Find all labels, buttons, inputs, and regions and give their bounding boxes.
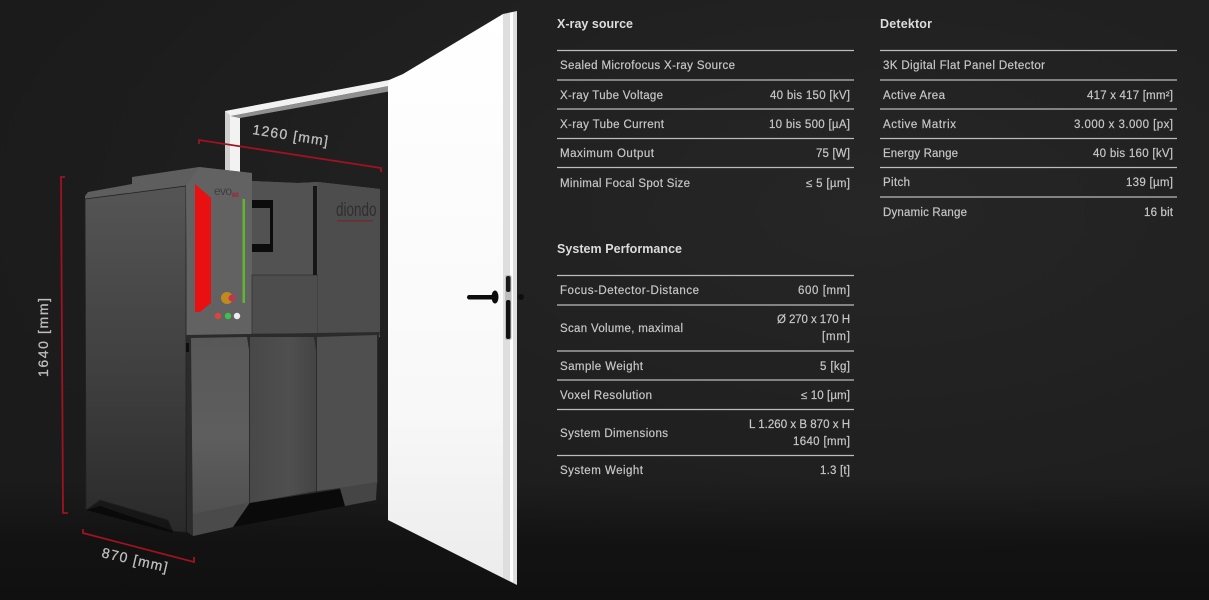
row: Pitch: Pitch: [883, 177, 910, 189]
machine model label: evo: [214, 184, 232, 198]
row: Sealed Microfocus X-ray Source: Sealed Microfocus X-ray Source: [560, 60, 735, 72]
brand logo underline: [337, 220, 373, 222]
row: System Dimensions: L 1.260 x B 870 x H: [749, 419, 850, 431]
dimension line: width 1260 mm: [199, 140, 381, 172]
door frame: [225, 80, 389, 172]
brand logo: diondo: [336, 199, 377, 221]
dimension line: height 1640 mm: [61, 177, 68, 513]
row: Dynamic Range: [883, 207, 1174, 219]
row: Active Area: Active Area: [883, 90, 946, 102]
row: X-ray Tube Current: 10 bis 500 [µA]: [769, 119, 850, 131]
row: Dynamic Range: 16 bit: [1144, 207, 1174, 219]
machine base dark gap: [233, 489, 345, 527]
row: X-ray Tube Voltage: X-ray Tube Voltage: [560, 90, 663, 102]
door edge highlight: [510, 12, 513, 582]
row: Scan Volume, maximal: Scan Volume, maximal: [560, 323, 683, 335]
machine lower cabinet right column: [317, 335, 377, 491]
machine lower square panel: [252, 275, 318, 334]
row: X-ray Tube Voltage: 40 bis 150 [kV]: [770, 90, 850, 102]
machine base shadow: [86, 506, 173, 533]
row: Scan Volume, maximal: [mm]: [822, 331, 850, 343]
machine top housing: [85, 167, 380, 340]
machine left side panel: [85, 186, 186, 532]
row: Energy Range: 40 bis 160 [kV]: [1093, 148, 1173, 160]
row: Energy Range: [883, 148, 1173, 160]
heading: X-ray source: X-ray source: [557, 17, 633, 31]
row: Voxel Resolution: ≤ 10 [µm]: [801, 390, 850, 402]
row: Active Matrix: Active Matrix: [883, 119, 956, 131]
table: System Performance: [557, 242, 854, 477]
table: X-ray source: [557, 17, 854, 190]
row: Minimal Focal Spot Size: Minimal Focal Spot Size: [560, 178, 690, 190]
row: Sample Weight: Sample Weight: [560, 361, 644, 373]
machine dark gap: [313, 186, 317, 275]
green light strip: [242, 199, 245, 303]
row: Minimal Focal Spot Size: ≤ 5 [µm]: [806, 178, 850, 190]
row: Focus-Detector-Distance: [560, 285, 850, 297]
dimension label: 1640 mm: 1640 [mm]: [35, 298, 51, 377]
machine upper right panel: [252, 181, 318, 275]
dimension label: 870 mm: 870 [mm]: [100, 544, 169, 575]
dimension line: depth 870 mm: [83, 529, 194, 562]
machine side latch: [186, 343, 189, 352]
row: System Weight: [560, 465, 850, 477]
row: Focus-Detector-Distance: 600 [mm]: [798, 285, 850, 297]
row: System Dimensions: [560, 419, 850, 448]
row: Scan Volume, maximal: Ø 270 x 170 H: [777, 314, 850, 326]
row: 3K Digital Flat Panel Detector: 3K Digital Flat Panel Detector: [883, 60, 1045, 72]
door lock plate: [505, 275, 512, 340]
row: Energy Range: Energy Range: [883, 148, 958, 160]
row: X-ray Tube Current: X-ray Tube Current: [560, 119, 665, 131]
heading: System Performance: System Performance: [557, 242, 682, 256]
red light strip: [195, 184, 211, 312]
door edge: [503, 11, 517, 585]
row: Voxel Resolution: [560, 390, 850, 402]
open door: [388, 11, 524, 585]
row: X-ray Tube Voltage: [560, 90, 850, 102]
machine lower cabinet dark edge: [186, 332, 380, 536]
machine lower cabinet left column: [191, 337, 249, 536]
row: Focus-Detector-Distance: Focus-Detector-Distance: [560, 285, 699, 297]
machine model number: 80: [232, 193, 239, 199]
dimension label: 1260 mm: 1260 [mm]: [252, 121, 329, 149]
door handle: [467, 290, 498, 304]
door handle back knob: [518, 294, 524, 300]
row: Active Area: 417 x 417 [mm²]: [1087, 90, 1173, 102]
machine: evo 80 CT system: [85, 167, 380, 536]
row: Maximum Output: Maximum Output: [560, 148, 655, 160]
row: Active Matrix: 3.000 x 3.000 [px]: [1074, 119, 1173, 131]
row: Sample Weight: [560, 361, 850, 373]
indicator lights: [215, 313, 240, 319]
row: System Weight: 1.3 [t]: [820, 465, 850, 477]
row: System Dimensions: 1640 [mm]: [793, 436, 850, 448]
machine plinth left: [193, 503, 247, 536]
machine front control panel: [186, 167, 252, 335]
heading: Detektor: Detektor: [880, 17, 932, 31]
row: Dynamic Range: Dynamic Range: [883, 207, 967, 219]
row: System Dimensions: System Dimensions: [560, 428, 668, 440]
row: Voxel Resolution: Voxel Resolution: [560, 390, 652, 402]
row: Maximum Output: [560, 148, 850, 160]
row: Pitch: [883, 177, 1173, 189]
door leaf: [388, 14, 503, 578]
row: Maximum Output: 75 [W]: [816, 148, 850, 160]
table: Detektor: [880, 17, 1177, 219]
row: System Weight: System Weight: [560, 465, 644, 477]
row: X-ray Tube Current: [560, 119, 850, 131]
row: Sample Weight: 5 [kg]: [820, 361, 850, 373]
row: Minimal Focal Spot Size: [560, 178, 850, 190]
row: Scan Volume, maximal: [560, 314, 850, 343]
machine right panel: [318, 182, 380, 334]
machine black window: [252, 200, 273, 252]
row: Pitch: 139 [µm]: [1126, 177, 1173, 189]
row: Active Area: [883, 90, 1173, 102]
machine plinth right: [340, 482, 377, 506]
emergency stop button: [221, 292, 236, 304]
machine lower cabinet middle column: [250, 337, 316, 503]
row: Active Matrix: [883, 119, 1173, 131]
